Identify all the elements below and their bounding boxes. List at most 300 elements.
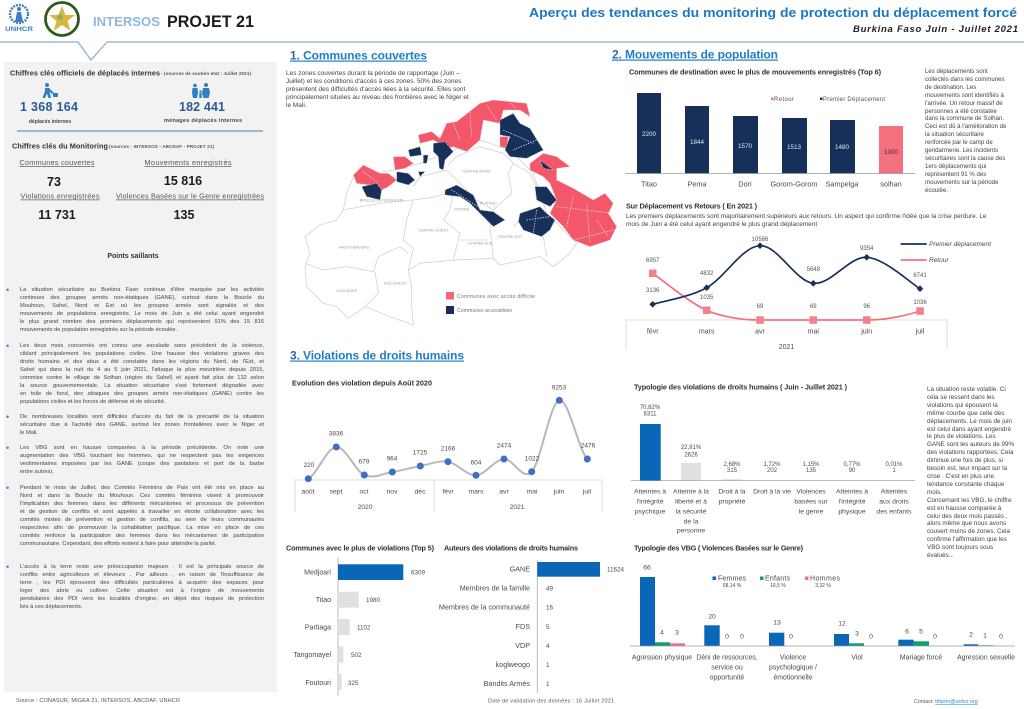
bar chart: violation types: 0,77% (843, 462, 861, 468)
bullet 1 marker: • (6, 285, 9, 295)
bar chart: violation types: des enfants (876, 508, 912, 516)
line chart: violations over time: mai (527, 488, 538, 496)
bar chart: gender-based violence types: 0 (725, 634, 729, 640)
bullet 1 text: mouvements de population enregistrés sur la période écoulée. (20, 327, 177, 333)
bar chart: perpetrators: 5 (546, 624, 550, 631)
bar chart: top destination communes: Sampelga (826, 180, 859, 188)
line chart: displacement vs returns: 96 (863, 304, 871, 310)
bar chart: top destination communes: Titao (641, 180, 657, 188)
bar chart: perpetrators: Membres de la famille (460, 584, 530, 592)
bullet 5 text: et de gestion de conflits et sont appelés à travailler en étroite collaboration avec les (20, 509, 264, 515)
bar chart: top destination communes: 1844 (690, 139, 704, 146)
text: movements commentary: dans la commune de Solhan. (925, 115, 1004, 122)
bar chart: top communes by violations (293, 558, 426, 696)
bar chart: violation types: basées sur (794, 498, 828, 506)
metric: communes: Communes couvertes (20, 158, 95, 167)
bar chart: violation types: 90 (849, 468, 856, 474)
metric: movements (144, 158, 232, 188)
subtitle: Burkina Faso Juin - Juillet 2021 (853, 24, 1018, 35)
text: violations commentary: crise . C'est en plus une (927, 473, 994, 480)
line chart: violations over time: juin (553, 488, 565, 496)
heading: monitoring figures: Chiffres clés du Monitoring (12, 142, 108, 150)
line chart: displacement vs returns: 5648 (807, 267, 821, 273)
text: violations commentary: est celui dans ayant engendré (927, 426, 1011, 433)
chart title: top destinations: Communes de destination avec le plus de mouvements enregistrés (Top 6) (629, 68, 882, 76)
bar chart: top destination communes: Pema (687, 180, 707, 188)
bullet 6 text: terre , les PDI éprouvent des difficultés particulières à acquérir des espaces pour (20, 580, 264, 586)
bar chart: gender-based violence types: émotionnelle (773, 674, 813, 682)
bar chart: gender-based violence types: 0 (869, 634, 873, 640)
bar chart: perpetrators: 4 (546, 643, 550, 650)
metric: gender-based violence (116, 192, 264, 222)
legend: top destinations (771, 97, 885, 103)
bar chart: gender-based violence types: psychologique / (769, 664, 817, 672)
source note: official figures: - (sources de soutien etat : Juillet 2021) (161, 71, 251, 76)
text: movements commentary: la situation sécuritaire (925, 131, 984, 138)
line chart: displacement vs returns: 3136 (646, 288, 660, 294)
bar chart: top communes by violations: 6309 (411, 570, 426, 576)
bar chart: gender-based violence types: 0 (740, 634, 744, 640)
bullet 2 text: Sahel qui dans la nuit du 4 au 5 juin 2021, l'attaque la plus meurtrière depuis 2015, (20, 367, 264, 373)
bullet 1 text: Mouhoun, Sahel, Nord et Est où les groupes armés sont signalés et des (20, 303, 264, 309)
map: region labels: CASCADES (336, 289, 358, 293)
bullet 1 text: La situation sécuritaire au Burkina Faso continue d'être marquée par les activités (20, 287, 264, 293)
bullet 1 text: le plus grand nombre des premiers déplacements qui représentent 91% des 15 816 (20, 319, 264, 325)
text: violations commentary: mois. (927, 489, 942, 496)
text: violations commentary: même courbe que celle des (927, 410, 1004, 417)
legend: displacement vs returns: Retour (929, 257, 949, 264)
line chart: displacement vs returns: 6741 (913, 273, 927, 279)
bar chart: gender-based violence types: 13 (773, 620, 781, 626)
bar chart: perpetrators: Bandits Armés (484, 679, 530, 688)
text: map description: principalement situées au niveau des frontières avec le Niger et (286, 94, 469, 101)
bar chart: violation types: 2626 (684, 452, 698, 458)
text: violations commentary: La situation reste volatile. Ci (927, 386, 1006, 393)
bar chart: violation types: 135 (806, 468, 817, 474)
bar chart: violation types: Droit à la (718, 488, 746, 496)
line chart: violations over time: 2020 (357, 504, 373, 511)
bar chart: top communes by violations: 502 (351, 652, 362, 659)
bullet 2 text: la source gouvernementale. La situation sécuritaire s'est fortement dégradée avec (20, 383, 264, 389)
map: region labels (336, 170, 523, 293)
text: displacement vs returns commentary (626, 213, 986, 228)
bar chart: perpetrators: 16 (546, 604, 554, 612)
bullet 3 text: le Mali. (20, 430, 38, 436)
figure: displaced persons: 1 368 164 (20, 100, 78, 114)
text: violations commentary: déplacements. Le mois de juin (927, 418, 1012, 425)
bar chart: violation types (631, 405, 915, 534)
map legend: Communes accessibles (457, 308, 512, 314)
legend: top destinations: Premier Déplacement (823, 97, 885, 103)
bar chart: perpetrators: 1 (546, 662, 550, 669)
bar chart: gender-based violence types: 3 (855, 630, 859, 638)
icon: family (192, 83, 210, 98)
metric: violations (20, 192, 100, 222)
legend: gender-based violence: Femmes (718, 576, 746, 582)
bar chart: violation types: l'intégrité (636, 498, 664, 506)
bar chart: top destination communes (625, 93, 915, 188)
text: violations commentary: confirme l'affirmation que les (927, 536, 1007, 543)
bar chart: top destination communes: solhan (880, 180, 902, 188)
bar chart: gender-based violence types: service ou (711, 664, 743, 672)
bar chart: gender-based violence types: Mariage forcé (900, 654, 942, 662)
bullet 5 text: Nord et dans la Boucle du Mouhoun. Ces comités féminins visent à promouvoir (20, 493, 264, 499)
text: violations commentary: tendance constante chaque (927, 481, 1004, 488)
text: displacement vs returns commentary: mois de Juin a été celui ayant engendré le plus grand déplacement (626, 221, 817, 228)
text: violations commentary: celui des deux mois passés , (927, 512, 1008, 520)
bar chart: perpetrators (439, 560, 625, 693)
bar chart: gender-based violence types: 3 (675, 630, 679, 636)
metric: gender-based violence: Violences Basées sur le Genre enregistrées (116, 192, 264, 200)
chart title: displacement vs returns: Sur Déplacement vs Retours ( En 2021 ) (626, 202, 758, 210)
bar chart: gender-based violence types: opportunité (710, 674, 744, 682)
line chart: violations over time: 1725 (413, 450, 428, 456)
line chart: violations over time: 2476 (581, 442, 596, 450)
bullet 3 text: sécuritaire due à l'activité des GANE, surtout les zones frontalières avec le Niger et (20, 422, 264, 428)
bar chart: top destination communes: Gorom-Gorom (770, 180, 818, 188)
bar chart: gender-based violence types: 0 (999, 634, 1003, 640)
line chart: violations over time: août (301, 488, 315, 496)
line chart: violations over time: mars (468, 488, 484, 496)
text: violations commentary: VBG sont toujours sous (927, 544, 993, 551)
text: violations commentary: alors même que nous avons (927, 520, 1006, 527)
legend: gender-based violence: 3,32 % (815, 583, 831, 589)
bullet 2 text: droits humains et des abus a été constatée dans les régions du Nord, de l'Est, et (20, 359, 264, 365)
chart title: violation types: Typologie des violations de droits humains ( Juin - Juillet 2021 ) (634, 382, 848, 392)
line chart: violations over time: oct (359, 488, 369, 496)
bar chart: violation types: aux droits (879, 498, 909, 506)
bar chart: gender-based violence types: 4 (660, 630, 664, 636)
bullet 1 text: continues des groupes armés non-étatiques (GANE), surtout dans la Boucle du (20, 295, 264, 301)
legend: gender-based violence (712, 576, 840, 589)
bar chart: gender-based violence types: 2 (969, 632, 973, 638)
bar chart: violation types: liberté et à (675, 498, 707, 506)
bar chart: top communes by violations: Medjoari (304, 570, 331, 576)
bar chart: violation types: le genre (799, 508, 824, 516)
bar chart: top communes by violations: Tangomayel (293, 652, 331, 659)
bar chart: gender-based violence types: 20 (708, 614, 716, 620)
bar chart: violation types: 315 (727, 468, 738, 474)
bar chart: violation types: 202 (767, 468, 778, 474)
bullet 2 marker: • (6, 341, 9, 351)
text: movements commentary: mouvements sur la période (925, 179, 998, 186)
bar chart: top destination communes: 1513 (787, 144, 801, 151)
map: region labels: HAUTS-BASSINS (339, 246, 370, 250)
bullet 6 text: liés à ces déplacements. (20, 604, 82, 610)
legend: gender-based violence: Hommes (810, 576, 840, 582)
metric: violations: 11 731 (38, 208, 76, 222)
heading: key points: Points saillants (107, 253, 159, 260)
bullet 5 text: Pendant le mois de Juillet, des Comités Féminins de Paix ont été mis en place au (20, 485, 264, 491)
text: violations commentary: est en hausse comparée à (927, 505, 1001, 512)
line chart: displacement vs returns: 1035 (700, 295, 714, 301)
bullet 3 text (20, 414, 264, 436)
bullet 5 text: communautaire. Cependant, des efforts restent à faire pour atteindre la parité. (20, 541, 216, 547)
line chart: violations over time: 3836 (329, 430, 344, 438)
line chart: violations over time: avr (499, 488, 509, 496)
bar chart: perpetrators: FDS (516, 622, 530, 631)
bar chart: perpetrators: VDP (515, 641, 530, 650)
line chart: displacement vs returns: 2021 (779, 344, 794, 351)
line chart: displacement vs returns: juin (860, 328, 872, 336)
text: movements commentary: 1ers déplacements qui (925, 163, 986, 170)
text: violations commentary: besoin est, leur impact sur la (927, 465, 1007, 472)
line chart: displacement vs returns: févr (647, 328, 659, 336)
footer: sources: Source : CONASUR, MIGEA 21, INTERSOS, ABCDAF, UNHCR (16, 698, 180, 704)
bar chart: gender-based violence types: 5 (919, 628, 923, 636)
bullet 4 marker: • (6, 443, 9, 453)
bar chart: violation types: Atteintes à (836, 488, 868, 496)
text: movements commentary: de destination. Les (925, 84, 976, 91)
text: movements commentary: gendarmerie. Les incidents (925, 147, 998, 154)
text: movements commentary: écoulée. (925, 187, 948, 194)
bullet 3 text: De nombreuses localités sont difficiles d'accès du fait de la précarité de la situation (20, 414, 264, 420)
text: violations commentary: diminue une fois de plus, si (927, 457, 1003, 464)
bar chart: perpetrators: koglweogo (496, 660, 530, 669)
bullet 6 text (20, 564, 264, 610)
map legend (446, 292, 535, 314)
logo: star emblem (46, 2, 78, 36)
map: restricted access communes (353, 100, 617, 247)
bar chart: gender-based violence types: 6 (905, 628, 909, 636)
map: region labels: CENTRE-EST (498, 235, 523, 239)
legend: gender-based violence: 16,5 % (770, 583, 786, 589)
text: violations commentary: des violations rapportées. Cela (927, 449, 1013, 456)
footer: validation date: Date de validation des données : 16 Juillet 2021 (488, 698, 614, 704)
text: violations commentary: couvert moins de zones. Cela (927, 528, 1010, 535)
bar chart: top communes by violations: 325 (348, 680, 359, 687)
bar chart: perpetrators: 1 (546, 681, 550, 688)
line chart: violations over time: déc (415, 488, 426, 496)
label: displaced households: ménages déplacés internes (164, 118, 242, 124)
bullet 5 text: comités mixtes de prévention et gestion de conflits, au sein de leurs communautés (20, 517, 264, 523)
bar chart: violation types: Atteinte à la (673, 488, 709, 496)
chart title: gender-based violence: Typologie des VBG ( Violences Basées sur le Genre) (634, 544, 804, 552)
bar chart: violation types: de la (684, 518, 699, 526)
bullet 1 text (20, 287, 264, 333)
logo: PROJET 21: PROJET 21 (167, 13, 254, 31)
map: region labels: CENTRE (454, 208, 470, 212)
line chart: displacement vs returns: avr (755, 328, 766, 336)
line chart: displacement vs returns: 69 (757, 304, 764, 310)
main title: Aperçu des tendances du monitoring de protection du déplacement forcé (529, 5, 1017, 20)
bullet 2 text (20, 343, 264, 405)
bullet 2 text: commise contre le village de Solhan (région du Sahel) et ayant fait plus de 132 selon (20, 375, 264, 381)
line chart: displacement vs returns: juil (915, 328, 925, 336)
bar chart: violation types: Atteintes (881, 488, 908, 496)
bar chart: perpetrators: GANE (510, 564, 530, 574)
bar chart: top communes by violations: Partiaga (305, 624, 331, 632)
text: movements commentary: renforcée par le camp de (925, 139, 993, 146)
bar chart: perpetrators: 49 (546, 586, 554, 592)
line chart: violations over time: 220 (304, 462, 315, 469)
metric: communes (20, 158, 95, 189)
bar chart: violation types: l'intégrité (838, 498, 866, 506)
bar chart: top communes by violations: Foutouri (305, 680, 331, 687)
heading: section 3: 3. Violations de droits humains (290, 348, 464, 362)
line chart: violations over time: 2021 (509, 504, 525, 511)
bullet 6 text: L'accès à la terre reste une préoccupation majeure . Il est la principale source de (20, 564, 264, 570)
bullet 2 text: populations civiles et les forces de défense et de sécurité. (20, 399, 165, 405)
text: movements commentary: mouvements sont identifiés à (925, 92, 1004, 99)
map: region labels: PLATEAU (480, 202, 497, 206)
bullet 5 text: l'implication des femmes dans les différents mécanismes et processus de prévention (20, 501, 264, 507)
bar chart: violation types: 22,91% (681, 445, 702, 451)
bar chart: top communes by violations: 1980 (366, 597, 381, 604)
line chart: violations over time: févr (442, 488, 454, 496)
bar chart: violation types: Droit à la vie (753, 488, 791, 496)
bar chart: gender-based violence types (630, 564, 1015, 682)
text: map description: le Mali. (286, 102, 307, 109)
logo: INTERSOS: INTERSOS (93, 14, 160, 29)
bullet 6 text: conflits entre agriculteurs et éleveurs . Par ailleurs , en raison de l'insuffisance de (20, 572, 264, 578)
line chart: violations over time: 679 (359, 458, 370, 466)
line chart: violations over time: nov (387, 488, 398, 496)
metric: gender-based violence: 135 (174, 208, 194, 222)
bullet 5 marker: • (6, 483, 9, 493)
text: map description: Juillet) et les conditions d'accès à ces zones. 50% des zones (286, 78, 461, 85)
bar chart: gender-based violence types: Viol (851, 654, 863, 662)
text: displacement vs returns commentary: Les premiers déplacements sont majoritairement supérieurs aux retours. Un aspect qui confirme l'idée que la crise perdure. Le (626, 213, 986, 220)
map legend: Communes avec accès difficile (457, 294, 535, 300)
bullet 1 text: mouvements de populations enregistrés. Le mois de Juin a été celui ayant engendré (20, 311, 264, 317)
map: accessible communes (362, 113, 557, 237)
bar chart: violation types: 1,15% (802, 462, 820, 468)
text: map description: présentent des difficultés d'accès liées à la sécurité. Elles sont (286, 86, 465, 93)
legend: displacement vs returns (901, 241, 992, 264)
bar chart: gender-based violence types: 0 (789, 634, 793, 640)
left grey panel (4, 62, 277, 692)
icon: walking displaced person (42, 83, 58, 98)
line chart: displacement vs returns: mars (699, 328, 715, 336)
bar chart: gender-based violence types: Agression physique (632, 654, 692, 662)
text: movements commentary (925, 68, 1006, 194)
metric: communes: 73 (47, 175, 61, 189)
bar chart: violation types: 1,72% (763, 462, 781, 468)
bar chart: top destination communes: 1570 (738, 143, 752, 150)
bar chart: top communes by violations: 1102 (357, 624, 371, 632)
bar chart: gender-based violence types: Agression sexuelle (957, 654, 1015, 662)
text: movements commentary: sécuritaires sont la cause des (925, 155, 1005, 162)
bullet 4 text: Les VBG sont en hausse comparées à la période précédente. On note une (20, 445, 264, 451)
line chart: displacement vs returns: 1036 (913, 300, 927, 306)
chart title: top communes by violations: Communes avec le plus de violations (Top 5) (286, 544, 435, 552)
text: movements commentary: Les déplacements sont (925, 68, 988, 75)
map: region labels: CENTRE-OUEST (418, 228, 449, 232)
text: violations commentary: violations qui épousent la (927, 402, 998, 409)
bullet 6 text: loger des abris ou cultiver. Cette situation est à l'origine de mouvements (20, 588, 264, 594)
bar chart: perpetrators: 11624 (607, 566, 625, 574)
bullet 5 text: comités renforce la participation des femmes dans les mécanismes de participation (20, 533, 264, 539)
text: violations commentary (927, 386, 1014, 559)
panel: key figures (10, 68, 264, 222)
bar chart: violation types: 2,68% (723, 462, 741, 468)
bar chart: violation types: Atteintes à (634, 488, 666, 496)
logo: UNHCR: UNHCR (5, 26, 33, 33)
map: region labels: CENTRE-NORD (462, 170, 491, 174)
bar chart: violation types: Violences (796, 488, 826, 496)
metric: movements: 15 816 (164, 174, 202, 188)
line chart: violations over time: 604 (471, 460, 482, 466)
text: violations commentary: GANE sont les auteurs de 99% (927, 441, 1014, 448)
text: violations commentary: évalués... (927, 552, 954, 559)
map: covered communes (305, 100, 617, 325)
bar chart: top destination communes: Dori (738, 180, 752, 188)
text: movements commentary: l'arrivée. Un retour massif de (925, 100, 1003, 107)
bar chart: gender-based violence types: 12 (838, 620, 846, 628)
map: region labels: BOUCLE DU MOUHOUN (360, 199, 404, 203)
text: movements commentary: Ceci est dû à l'amélioration de (925, 123, 1006, 130)
line chart: displacement vs returns: 4832 (700, 271, 714, 277)
heading: section 1: 1. Communes couvertes (290, 48, 427, 62)
line chart: violations over time: juil (582, 488, 592, 496)
bar chart: gender-based violence types: 1 (983, 632, 987, 640)
line chart: violations over time: sept (330, 488, 343, 496)
line chart: displacement vs returns (626, 237, 947, 351)
bullet 5 text (20, 485, 264, 547)
bar chart: violation types: 0,01% (885, 462, 903, 468)
bullet 4 text: augmentation des VBG touchant les hommes, qui ne respectent pas les exigences (20, 453, 264, 459)
line chart: displacement vs returns: 10586 (752, 237, 769, 243)
line chart: displacement vs returns: mai (808, 328, 819, 336)
metric: violations: Violations enregistrées (20, 192, 100, 200)
bar chart: violation types: personne (677, 528, 705, 534)
line chart: violations over time: 2474 (497, 442, 512, 450)
bar chart: violation types: 1 (892, 468, 896, 474)
bar chart: violation types: physique (838, 508, 866, 516)
line chart: violations over time: 9253 (552, 384, 567, 392)
bullet 3 marker: • (6, 412, 9, 422)
bullet 4 text: vestimentaires imposées par les GANE (coupe des pantalons et port de la barbe (20, 461, 264, 467)
bullet 2 text: en toile de fond, des attaques des groupes armés non-étatiques (GANE) contre les (20, 391, 264, 397)
bar chart: gender-based violence types: 66 (643, 564, 651, 572)
heading: section 2: 2. Mouvements de population (612, 48, 778, 62)
header divider with notch (0, 42, 1024, 60)
bullet 4 text: entre autres). (20, 469, 54, 475)
figure: displaced households: 182 441 (179, 100, 225, 114)
bullet 6 text: pendulaires des PDI vers les localités d'origine, en dépit des risques de protection (20, 596, 264, 602)
text: movements commentary: personnes a été constatée (925, 108, 997, 115)
bar chart: gender-based violence types: 0 (933, 634, 937, 640)
map base regions (305, 140, 577, 325)
line chart: displacement vs returns: 69 (810, 304, 817, 310)
text: violations commentary: Concernant les VBG, le chiffre (927, 497, 1012, 504)
legend: top destinations: Retour (774, 97, 794, 103)
legend: gender-based violence: 68,14 % (723, 583, 742, 589)
source note: monitoring: (sources - INTERSOS - ABCDAF - PROJET 21) (109, 144, 214, 149)
heading: official figures: Chiffres clés officiels de déplacés internes (10, 68, 160, 78)
text: violations commentary: cela se ressent dans les (927, 394, 995, 401)
label: displaced persons: déplacés internes (29, 119, 71, 125)
text: movements commentary: représentent 91 % des (925, 171, 986, 178)
text: movements commentary: collectés dans les communes (925, 76, 1005, 83)
bar chart: violation types: psychique (635, 508, 666, 516)
bullet 2 text: Les deux mois concernés ont connu une escalade sans précédent de la violence, (20, 343, 264, 349)
text: map description: Les zones couvertes durant la période de rapportage (Juin – (286, 70, 460, 77)
bar chart: top communes by violations: Titao (316, 597, 331, 604)
bullet 2 text: ciblant principalement les populations civiles. Une hausse des violations graves des (20, 351, 264, 357)
bar chart: violation types: propriété (719, 498, 746, 506)
legend: displacement vs returns: Premier déplacement (929, 241, 992, 248)
bar chart: perpetrators: Membres de la communauté (439, 602, 530, 612)
bar chart: top destination communes: 1480 (835, 144, 849, 151)
text: map description (286, 70, 469, 109)
bullet 4 text (20, 445, 264, 475)
map: region labels: CENTRE-SUD (467, 242, 493, 246)
line chart: violations over time: 964 (387, 456, 398, 462)
bar chart: violation types: 8311 (644, 412, 657, 418)
line chart: violations over time: 2166 (441, 446, 456, 452)
